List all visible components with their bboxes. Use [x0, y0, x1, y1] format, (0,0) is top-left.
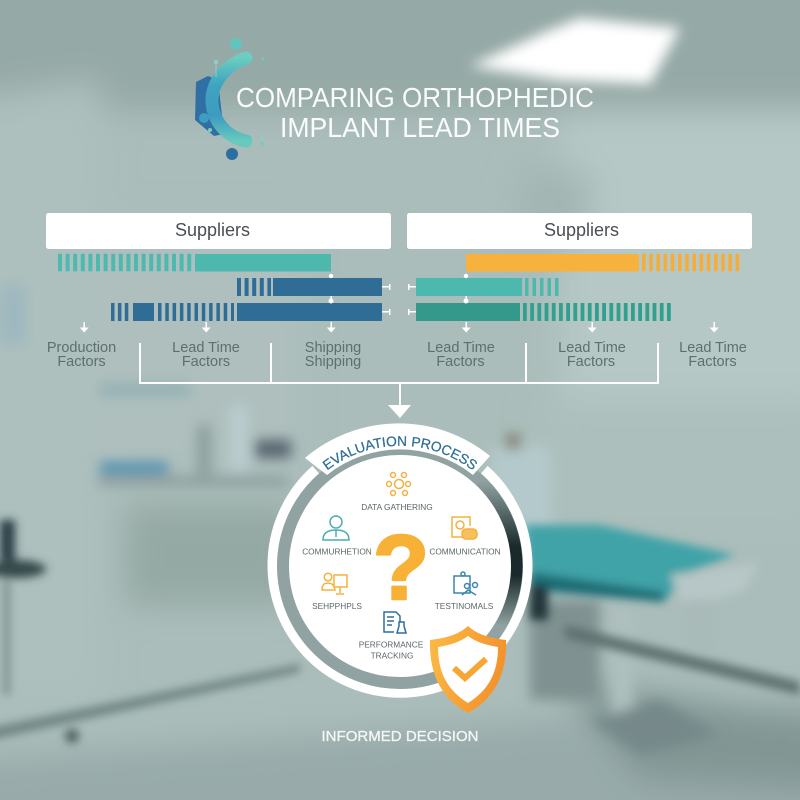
- label: data gathering: DATA GATHERING: [361, 502, 433, 512]
- outer white ring: [273, 470, 527, 692]
- gray inner ring: [283, 449, 517, 683]
- banner: [305, 423, 490, 475]
- icon: document: [384, 612, 406, 633]
- label: sehpphpls: SEHPPHPLS: [312, 601, 362, 611]
- factor labels: Lead Time: [558, 340, 626, 356]
- panel: right suppliers header: [407, 213, 752, 249]
- factor labels: Production: [47, 340, 116, 356]
- factor labels: Lead Time: [427, 340, 495, 356]
- factor labels: Factors: [182, 354, 230, 370]
- title: [236, 82, 594, 143]
- factor labels: Factors: [57, 354, 106, 370]
- panel: evaluation circle: [268, 423, 532, 698]
- label: performance tracking: TRACKING: [371, 650, 413, 660]
- panel: right suppliers header: Suppliers: [544, 220, 619, 240]
- panel: left suppliers header: [46, 213, 391, 249]
- icon: logo: [195, 38, 264, 160]
- title: IMPLANT LEAD TIMES: [280, 112, 560, 143]
- panel: left suppliers header: Suppliers: [175, 220, 250, 240]
- factor labels: Shipping: [305, 340, 361, 356]
- callout: informed decision: INFORMED DECISION: [322, 729, 478, 745]
- factor labels: Lead Time: [172, 340, 240, 356]
- icon: testimonials: [454, 572, 478, 595]
- factor labels: Factors: [567, 354, 615, 370]
- chart: right supplier bars: [408, 254, 740, 321]
- arrows: factor pointers: [80, 322, 719, 332]
- label: performance tracking: PERFORMANCE: [359, 640, 424, 650]
- icon: data gathering: [386, 472, 410, 496]
- label: performance tracking: [359, 640, 424, 660]
- icon: shield: [430, 626, 506, 713]
- icon: supplier profile: [322, 573, 347, 594]
- factor labels: [47, 340, 747, 370]
- factor labels: Shipping: [305, 354, 361, 370]
- factor labels: Lead Time: [679, 340, 747, 356]
- bracket connector and arrow: [140, 343, 658, 418]
- icon: communication: [452, 517, 477, 539]
- chart: left supplier bars: [58, 254, 390, 321]
- label: communication: COMMUNICATION: [429, 546, 501, 556]
- factor labels: Factors: [436, 354, 485, 370]
- white disc: [289, 455, 511, 677]
- factor labels: Factors: [688, 354, 737, 370]
- icon: question mark: ?: [373, 517, 429, 619]
- icon: person: [323, 516, 349, 540]
- label: commurhetion: COMMURHETION: [302, 546, 372, 556]
- title: COMPARING ORTHOPHEDIC: [236, 82, 594, 113]
- label: testimonials: TESTINOMALS: [435, 601, 494, 611]
- banner heading: EVALUATION PROCESS: [322, 436, 477, 470]
